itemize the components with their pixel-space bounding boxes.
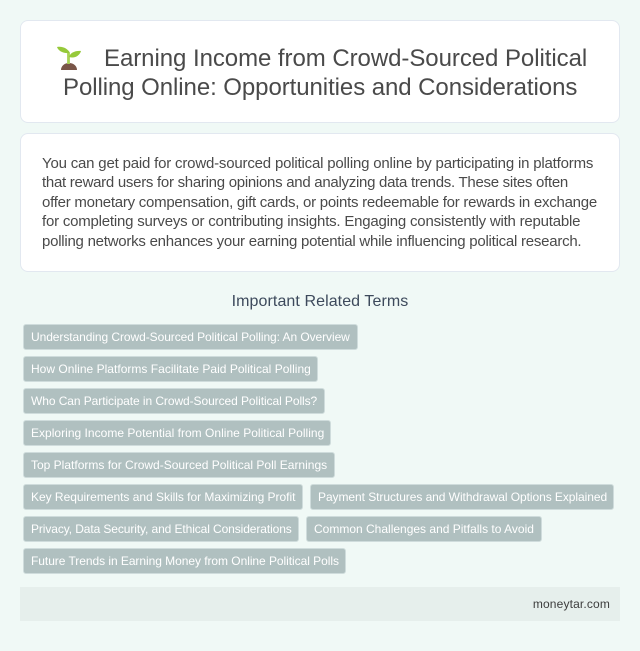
tag 1 bbox=[23, 324, 358, 350]
tag 6: Key Requirements and Skills for Maximizing Profit bbox=[31, 490, 295, 504]
tag 4 bbox=[23, 420, 331, 446]
tag 9 bbox=[306, 516, 542, 542]
paragraph text: You can get paid for crowd-sourced political polling online by participating in platforms bbox=[42, 155, 593, 172]
tag list bbox=[23, 324, 614, 574]
paragraph text: for completing surveys or contributing insights. Engaging consistently with reputable bbox=[42, 213, 580, 230]
paragraph text: polling networks enhances your earning potential while influencing political research. bbox=[42, 233, 581, 250]
title line 1: Earning Income from Crowd-Sourced Political bbox=[104, 45, 587, 72]
tag 4: Exploring Income Potential from Online Political Polling bbox=[31, 426, 324, 440]
paragraph text bbox=[42, 155, 597, 250]
tag 10: Future Trends in Earning Money from Online Political Polls bbox=[31, 554, 339, 568]
paragraph text: that reward users for sharing opinions and analyzing data trends. These sites often bbox=[42, 174, 568, 191]
footer bar bbox=[20, 587, 620, 621]
tag 8: Privacy, Data Security, and Ethical Considerations bbox=[31, 522, 292, 536]
panel: intro paragraph bbox=[20, 133, 620, 272]
tag 5 bbox=[23, 452, 335, 478]
heading: important related terms: Important Related Terms bbox=[232, 293, 408, 310]
tag 7 bbox=[310, 484, 614, 510]
tag 7: Payment Structures and Withdrawal Options Explained bbox=[318, 490, 607, 504]
tag 6 bbox=[23, 484, 303, 510]
icon: seedling bbox=[57, 46, 81, 70]
paragraph text: offer monetary compensation, gift cards, or points redeemable for rewards in exchange bbox=[42, 194, 597, 211]
tag 3: Who Can Participate in Crowd-Sourced Political Polls? bbox=[31, 394, 317, 408]
tag 2 bbox=[23, 356, 318, 382]
tag 3 bbox=[23, 388, 325, 414]
tag 10 bbox=[23, 548, 346, 574]
tag 2: How Online Platforms Facilitate Paid Political Polling bbox=[31, 362, 311, 376]
tag 9: Common Challenges and Pitfalls to Avoid bbox=[314, 522, 534, 536]
tag 8 bbox=[23, 516, 299, 542]
footer source text: moneytar.com bbox=[533, 597, 610, 611]
tag 1: Understanding Crowd-Sourced Political Polling: An Overview bbox=[31, 330, 350, 344]
tag 5: Top Platforms for Crowd-Sourced Political Poll Earnings bbox=[31, 458, 327, 472]
title line 2: Polling Online: Opportunities and Considerations bbox=[63, 74, 577, 101]
panel: title card bbox=[20, 20, 620, 123]
